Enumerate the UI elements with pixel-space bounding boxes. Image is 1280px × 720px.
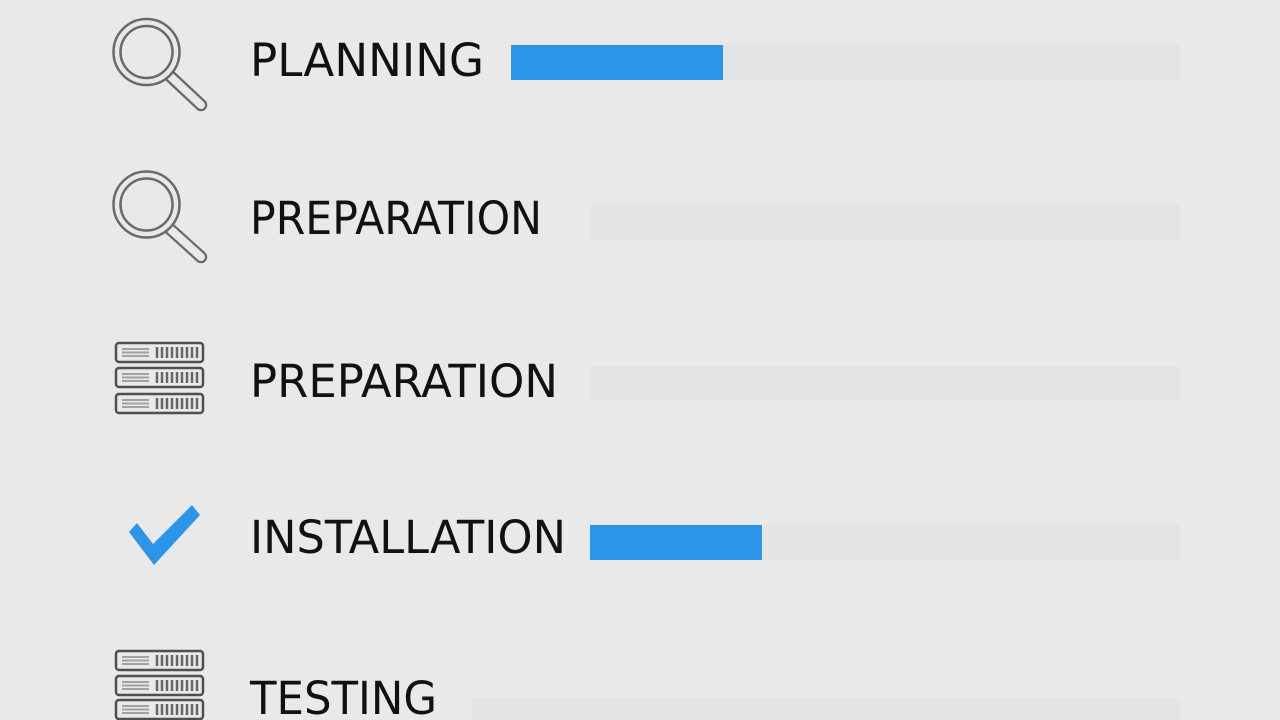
progress bar: preparation: [591, 366, 1180, 401]
row: testing: [116, 651, 1180, 720]
progress bar: planning: [511, 45, 1180, 80]
label: preparation: PREPARATION: [250, 355, 558, 408]
label: installation: INSTALLATION: [250, 511, 566, 564]
icon: magnifying glass: [117, 175, 201, 257]
progress bar: testing: [472, 698, 1180, 720]
icon: magnifying glass: [117, 22, 201, 105]
row: preparation 1: [117, 175, 1180, 257]
icon: server stack: [116, 651, 203, 719]
label: planning: PLANNING: [250, 34, 484, 87]
icon: check mark: [129, 505, 200, 565]
label: preparation: PREPARATION: [250, 192, 542, 245]
row: preparation 2: [116, 343, 1180, 413]
icon: server stack: [116, 343, 203, 413]
row: planning: [117, 22, 1180, 105]
progress bar: installation: [590, 525, 1180, 560]
row: installation: [129, 505, 1180, 565]
progress bar: preparation: [591, 205, 1180, 240]
